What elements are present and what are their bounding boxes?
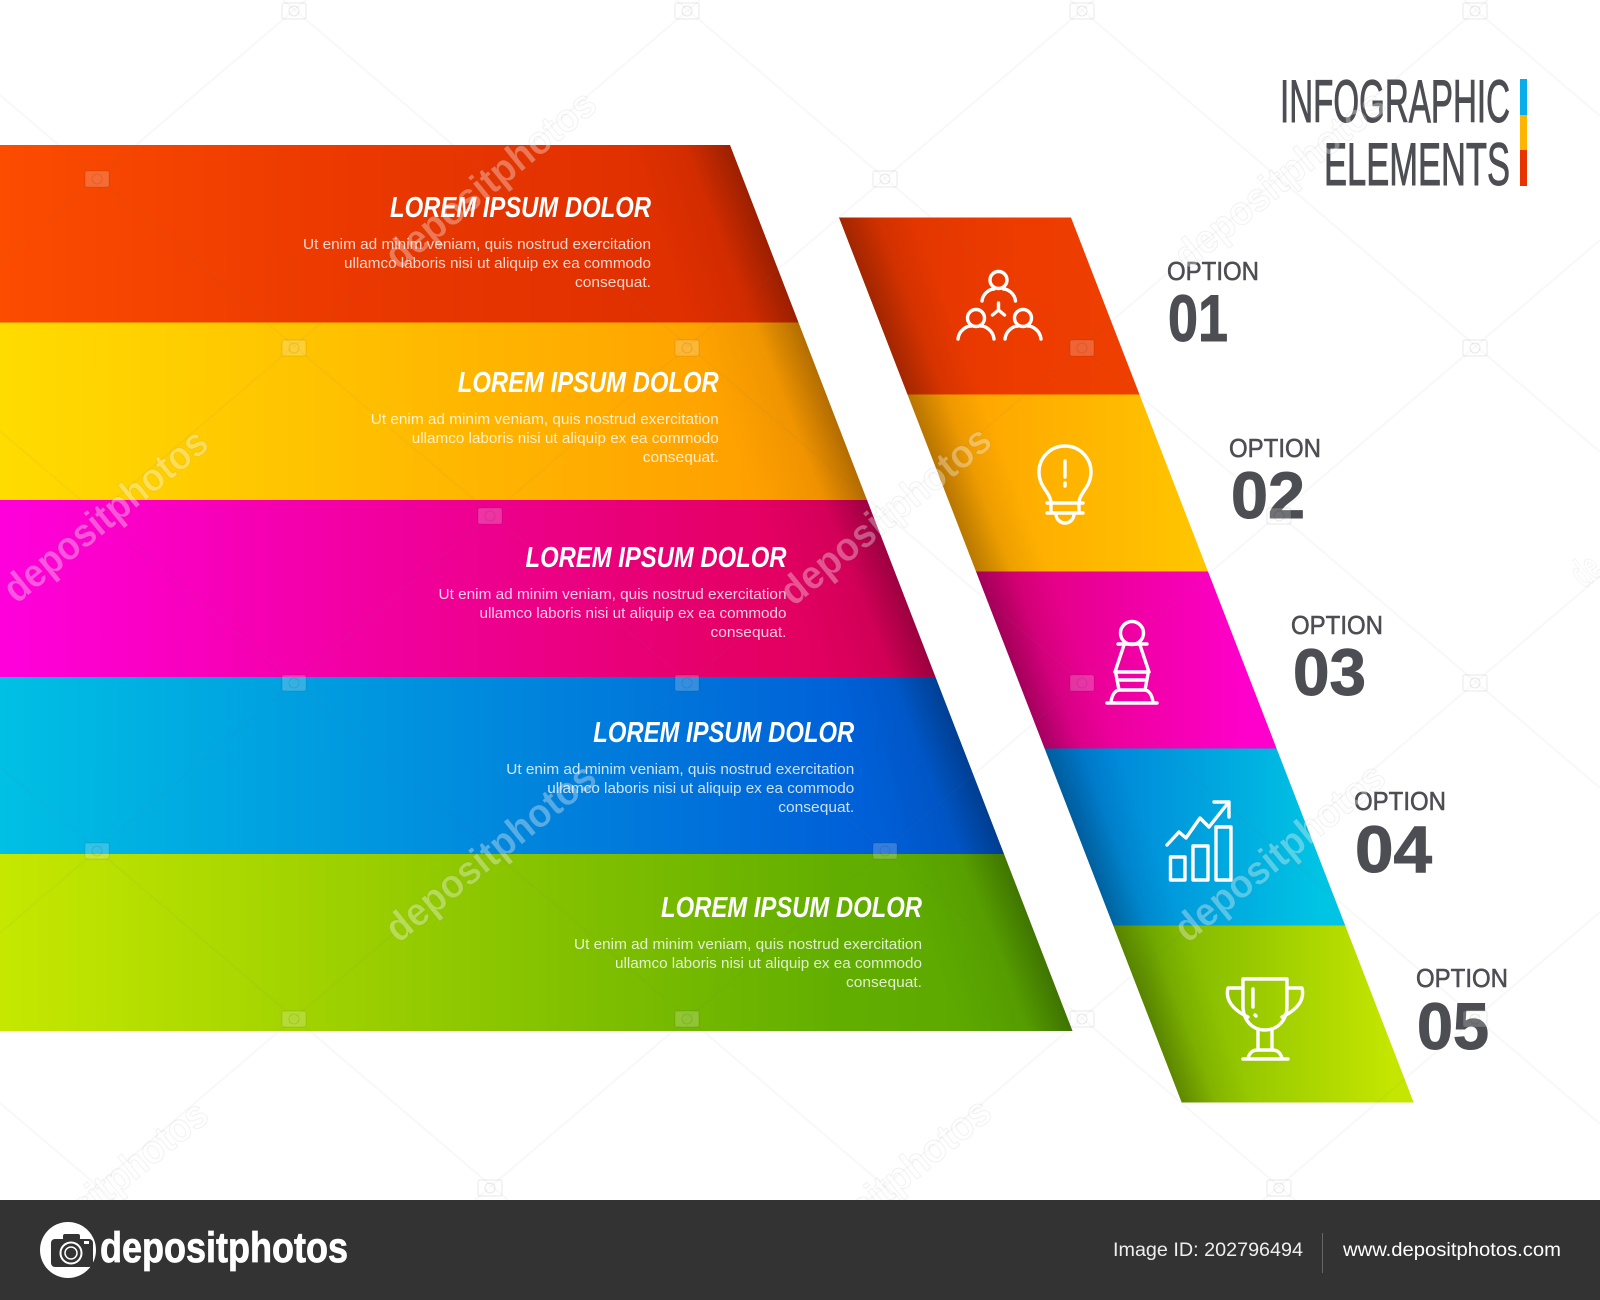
text block: band 5: consequat.	[846, 975, 922, 991]
band 2 yellow	[0, 322, 867, 500]
watermark: stock photo overlay: depositphotos	[0, 1092, 217, 1284]
text block: band 2: consequat.	[643, 450, 719, 466]
band 5 green	[0, 854, 1072, 1031]
text block: band 1: consequat.	[575, 275, 651, 291]
panel: left stacked bands	[0, 145, 1072, 1031]
panel: right slanted column	[839, 218, 1414, 1102]
segment 4 blue	[1045, 748, 1345, 926]
text block: band 3: Ut enim ad minim veniam, quis nostrud exercitation	[438, 587, 786, 603]
text block: band 2: ullamco laboris nisi ut aliquip ex ea commodo	[412, 431, 719, 447]
label: option 05: OPTION	[1416, 963, 1508, 993]
band 1 red	[0, 145, 798, 322]
text block: band 4: Ut enim ad minim veniam, quis nostrud exercitation	[506, 762, 854, 778]
footer image id: Image ID: 202796494	[1113, 1240, 1303, 1261]
label: option 02: 02	[1231, 458, 1305, 532]
text block: band 3: consequat.	[710, 625, 786, 641]
text block: band 5: Ut enim ad minim veniam, quis nostrud exercitation	[574, 937, 922, 953]
footer logo wordmark: depositphotos	[100, 1224, 348, 1272]
heading colour bar	[1520, 79, 1527, 186]
text block: band 5	[574, 892, 922, 991]
footer website: www.depositphotos.com	[1342, 1240, 1561, 1261]
heading: infographic elements	[1280, 68, 1527, 198]
icon: footer camera logo	[40, 1222, 96, 1278]
text block: band 3: LOREM IPSUM DOLOR	[526, 542, 787, 574]
watermark: stock photo overlay: depositphotos	[377, 81, 605, 278]
label: option 05	[1416, 963, 1508, 1063]
label: option 04: OPTION	[1354, 786, 1446, 816]
band 3 magenta	[0, 500, 936, 677]
label: option 01	[1167, 256, 1259, 355]
segment 1 red	[839, 218, 1140, 394]
watermark: stock photo overlay: depositphotos	[1166, 81, 1394, 278]
watermark: stock photo overlay: depositphotos	[377, 754, 605, 951]
label: option 03: OPTION	[1291, 610, 1383, 640]
icon: chess pawn	[1107, 622, 1157, 703]
text block: band 5: LOREM IPSUM DOLOR	[661, 892, 922, 924]
label: option 02	[1229, 433, 1321, 532]
watermark: stock photo overlay: depositphotos	[772, 417, 1000, 614]
label: option 04	[1354, 786, 1446, 886]
text block: band 3: ullamco laboris nisi ut aliquip ex ea commodo	[480, 606, 786, 622]
icon: growth chart	[1167, 802, 1231, 880]
text block: band 2	[371, 367, 719, 466]
footer bar	[0, 1200, 1600, 1300]
icon: light bulb	[1039, 446, 1091, 523]
icon: team	[958, 272, 1041, 339]
text block: band 3	[438, 542, 787, 641]
text block: band 4	[506, 717, 854, 816]
text block: band 1: LOREM IPSUM DOLOR	[390, 192, 651, 224]
label: option 02: OPTION	[1229, 433, 1321, 463]
label: option 05: 05	[1417, 989, 1489, 1063]
text block: band 1: Ut enim ad minim veniam, quis nostrud exercitation	[303, 237, 651, 253]
text block: band 4: LOREM IPSUM DOLOR	[593, 717, 854, 749]
text block: band 1	[303, 192, 651, 291]
text block: band 4: ullamco laboris nisi ut aliquip ex ea commodo	[547, 781, 854, 797]
label: option 01: 01	[1168, 281, 1228, 355]
text block: band 2: LOREM IPSUM DOLOR	[458, 367, 719, 399]
watermark: stock photo overlay: depositphotos	[0, 420, 217, 612]
watermark: stock photo overlay: depositphotos	[1166, 754, 1394, 951]
icon: trophy	[1227, 979, 1303, 1059]
label: option 03: 03	[1293, 635, 1366, 709]
segment 5 green	[1113, 926, 1414, 1102]
segment 2 yellow	[908, 394, 1208, 572]
label: option 03	[1291, 610, 1383, 709]
text block: band 2: Ut enim ad minim veniam, quis nostrud exercitation	[371, 412, 719, 428]
label: option 01: OPTION	[1167, 256, 1259, 286]
text block: band 1: ullamco laboris nisi ut aliquip ex ea commodo	[344, 256, 651, 272]
label: option 04: 04	[1355, 812, 1432, 886]
watermark: stock photo overlay: depositphotos	[772, 1089, 1000, 1286]
segment 3 magenta	[976, 572, 1277, 748]
text block: band 4: consequat.	[778, 800, 854, 816]
text block: band 5: ullamco laboris nisi ut aliquip ex ea commodo	[615, 956, 922, 972]
band 4 blue	[0, 677, 1004, 854]
